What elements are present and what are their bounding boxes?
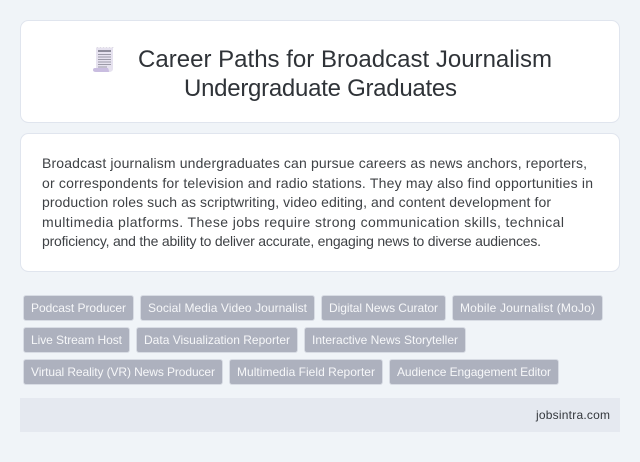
panel: career tags — [24, 296, 602, 384]
tag: Social Media Video Journalist — [140, 296, 314, 320]
title — [138, 46, 552, 102]
tag: Podcast Producer: Podcast Producer — [31, 301, 126, 315]
tag: Virtual Reality (VR) News Producer: Virtual Reality (VR) News Producer — [31, 365, 215, 379]
panel: description — [20, 134, 620, 272]
tag: Multimedia Field Reporter — [230, 360, 382, 384]
description text: or correspondents for television and radio stations. They may also find opportunities in — [42, 175, 593, 191]
description text: proficiency, and the ability to deliver accurate, engaging news to diverse audiences. — [42, 233, 541, 249]
tag: Mobile Journalist (MoJo): Mobile Journalist (MoJo) — [460, 301, 595, 315]
footer — [20, 398, 620, 432]
tag: Podcast Producer — [24, 296, 134, 320]
tag: Interactive News Storyteller — [304, 328, 466, 352]
tag: Digital News Curator: Digital News Curator — [329, 301, 438, 315]
tag: Interactive News Storyteller: Interactive News Storyteller — [312, 333, 458, 347]
description text: multimedia platforms. These jobs require strong communication skills, technical — [42, 214, 564, 230]
title: Undergraduate Graduates — [184, 75, 457, 102]
title: Career Paths for Broadcast Journalism — [138, 46, 552, 73]
tag: Virtual Reality (VR) News Producer — [24, 360, 222, 384]
icon: document scroll — [93, 47, 114, 72]
tag: Audience Engagement Editor — [390, 360, 558, 384]
description text: production roles such as scriptwriting, video editing, and content development for — [42, 194, 551, 210]
description text — [42, 155, 593, 249]
tag: Multimedia Field Reporter: Multimedia Field Reporter — [237, 365, 375, 379]
tag: Mobile Journalist (MoJo) — [452, 296, 602, 320]
footer: jobsintra.com — [535, 408, 610, 422]
tag: Digital News Curator — [322, 296, 446, 320]
tag: Audience Engagement Editor: Audience Engagement Editor — [397, 365, 551, 379]
tag: Data Visualization Reporter: Data Visualization Reporter — [144, 333, 290, 347]
panel: title card — [20, 20, 620, 122]
tag: Social Media Video Journalist: Social Media Video Journalist — [148, 301, 308, 315]
tag: Live Stream Host: Live Stream Host — [31, 333, 123, 347]
tag: Live Stream Host — [24, 328, 130, 352]
description text: Broadcast journalism undergraduates can pursue careers as news anchors, reporters, — [42, 155, 587, 171]
tag: Data Visualization Reporter — [136, 328, 298, 352]
